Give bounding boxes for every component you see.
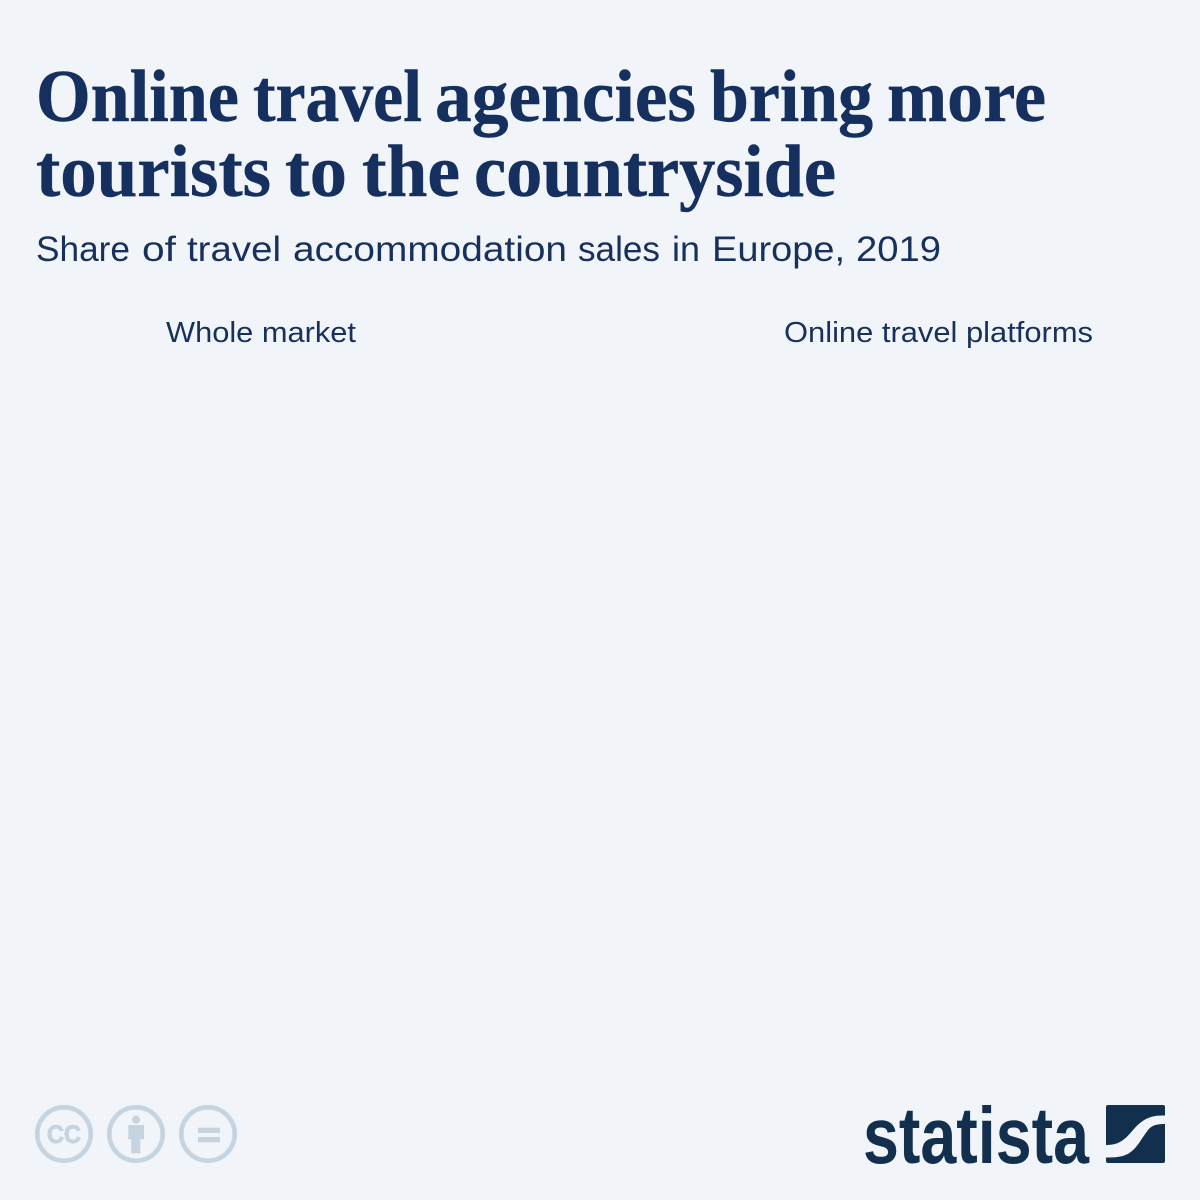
title: to: [285, 131, 347, 213]
icon: attribution: [109, 1107, 163, 1161]
icon: no derivatives: [181, 1107, 235, 1161]
column heading: online travel platforms: Online travel platforms: [784, 317, 1093, 349]
icon: creative commons: [37, 1107, 91, 1161]
subtitle: in: [672, 230, 700, 269]
title: tourists: [36, 131, 271, 213]
title: bring: [710, 56, 873, 138]
subtitle: of: [142, 230, 176, 269]
column heading: whole market: Whole market: [166, 317, 356, 349]
subtitle: Europe,: [712, 230, 845, 269]
subtitle: travel: [187, 230, 281, 269]
title: [36, 56, 1046, 213]
title: travel: [253, 56, 422, 138]
logo mark: [1106, 1105, 1165, 1163]
title: Online: [36, 56, 239, 138]
subtitle: [36, 230, 941, 269]
logo wordmark: statista: [863, 1091, 1089, 1180]
statista logo: [863, 1091, 1165, 1180]
title: the: [362, 131, 460, 213]
subtitle: Share: [36, 230, 130, 269]
title: more: [887, 56, 1046, 138]
title: countryside: [474, 131, 836, 213]
subtitle: accommodation: [293, 230, 567, 269]
icon: creative commons: CC: [47, 1121, 81, 1149]
subtitle: 2019: [856, 230, 941, 269]
title: agencies: [435, 56, 696, 138]
licence icons: [37, 1107, 235, 1161]
subtitle: sales: [578, 230, 660, 269]
